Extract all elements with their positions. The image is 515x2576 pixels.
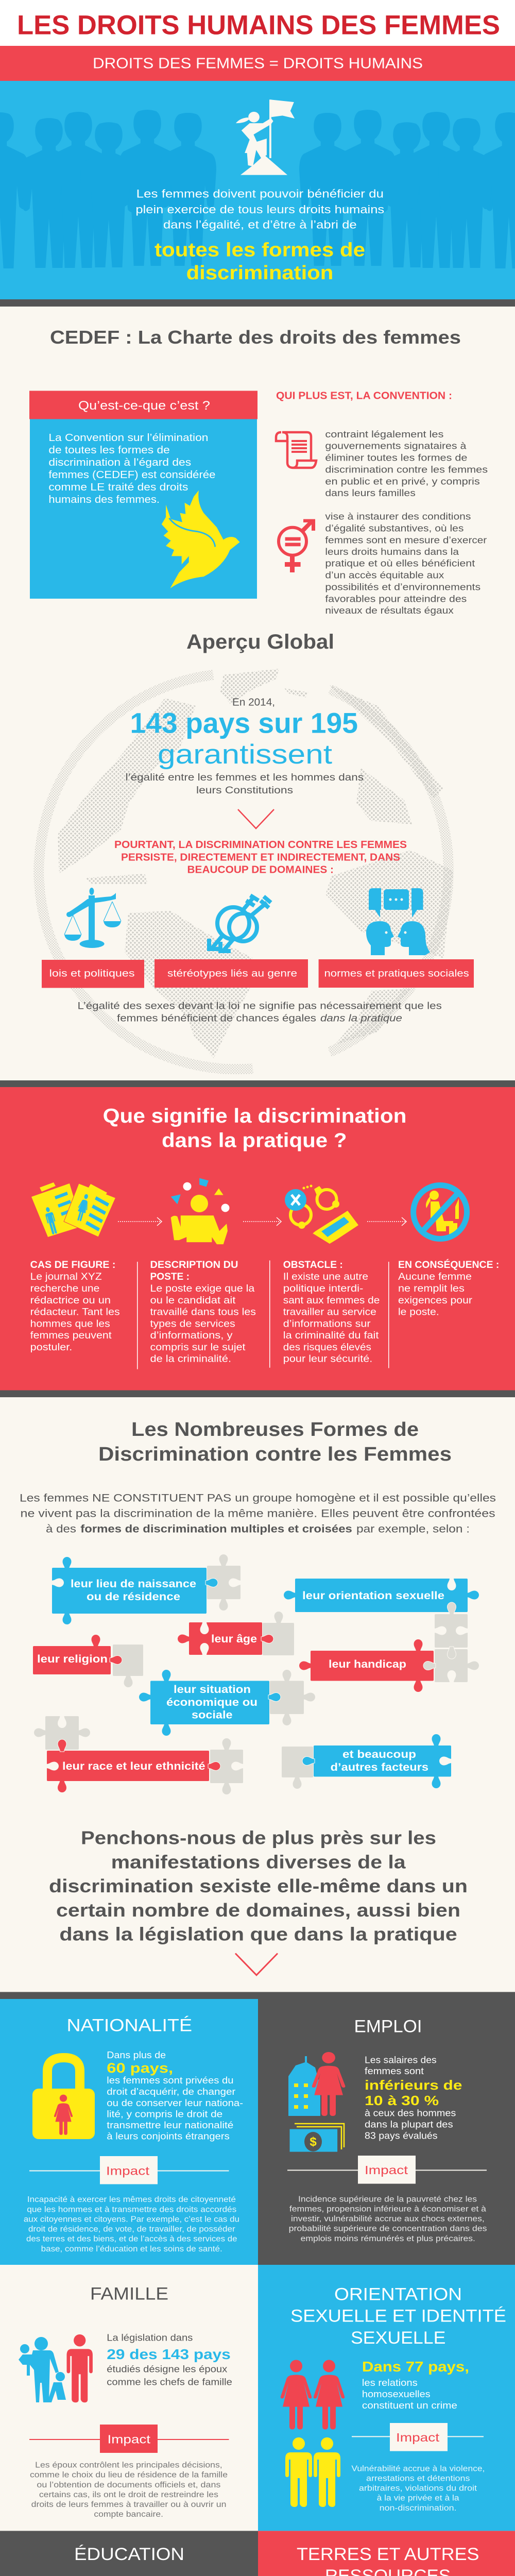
column: obstacle: OBSTACLE : xyxy=(283,1259,343,1270)
text: vise: pratique et où elles bénéficient xyxy=(325,558,475,569)
stat: 143 pays: En 2014, xyxy=(232,697,275,708)
impact text xyxy=(289,2195,487,2243)
impact text: certains cas, ils ont le droit de restreindre les xyxy=(39,2490,218,2499)
arrow: chevron xyxy=(235,1954,278,1975)
impact text: Les époux contrôlent les principales décisions, xyxy=(35,2461,222,2470)
panel: éducation xyxy=(0,2531,258,2576)
puzzle: religion: leur religion xyxy=(37,1653,108,1665)
hero text: dans l’égalité, et d’être à l’abri de xyxy=(163,218,357,231)
impact text: des terres et des biens, et de l’accès à des services de xyxy=(26,2235,237,2244)
impact text: probabilité supérieure de concentration dans des xyxy=(289,2225,487,2233)
text: definition xyxy=(48,432,215,505)
column: obstacle: des risques élevés xyxy=(283,1342,371,1353)
puzzle: autres facteurs: d’autres facteurs xyxy=(331,1761,428,1773)
text: vise: d’un accès équitable aux xyxy=(325,570,444,580)
panel: nationalité: NATIONALITÉ xyxy=(67,2015,192,2035)
stat text: Les salaires des xyxy=(365,2055,437,2065)
text: definition: La Convention sur l’élimination xyxy=(48,432,208,444)
text: contraint: discrimination contre les femmes xyxy=(325,465,488,475)
icon: couples xyxy=(281,2360,345,2507)
column: description du poste: DESCRIPTION DU xyxy=(150,1259,238,1270)
impact text: droit de résidence, de vote, de travailler, de posséder xyxy=(28,2225,235,2234)
column: cas de figure: rédacteur. Tant les xyxy=(30,1307,120,1318)
domain boxes: stéréotypes liés au genre xyxy=(167,969,297,979)
heading: penchons-nous: certain nombre de domaines, aussi bien xyxy=(56,1900,460,1921)
impact text: compte bancaire. xyxy=(94,2510,163,2519)
text: vise: niveaux de résultats égaux xyxy=(325,605,454,616)
arrow 3 xyxy=(367,1217,406,1226)
column: obstacle: la criminalité du fait xyxy=(283,1330,379,1341)
stat: 143 pays: 143 pays sur 195 xyxy=(130,707,358,739)
arrow 2 xyxy=(243,1217,281,1226)
domain boxes: lois et politiques xyxy=(49,969,135,979)
column: cas de figure: femmes peuvent xyxy=(30,1330,112,1341)
stat text: inférieurs de xyxy=(365,2077,462,2093)
panel: famille xyxy=(0,2265,258,2531)
icon: no entry woman xyxy=(414,1185,467,1239)
crowd silhouettes xyxy=(0,110,515,268)
column: description du poste: Le poste exige que la xyxy=(150,1283,254,1294)
icon: talking heads xyxy=(366,888,430,955)
icon: banknotes: $ xyxy=(310,2135,317,2149)
impact text: investir, vulnérabilité accrue aux chocs externes, xyxy=(291,2215,485,2224)
panel: orientation sexuelle: SEXUELLE ET IDENTITÉ xyxy=(290,2306,506,2326)
column: description du poste: types de services xyxy=(150,1318,235,1329)
icon: scroll xyxy=(276,432,316,468)
text: égalité devant la loi: L’égalité des sexes devant la loi ne signifie pas nécessairement que les xyxy=(77,1001,442,1012)
hero text: Les femmes doivent pouvoir bénéficier du xyxy=(136,187,384,200)
puzzle: religion xyxy=(33,1635,143,1687)
column: obstacle: sant aux femmes de xyxy=(283,1295,380,1306)
text: vise xyxy=(325,511,487,616)
hero text xyxy=(135,187,384,231)
stat: 143 pays xyxy=(126,697,364,796)
heading: penchons-nous xyxy=(49,1827,468,1945)
column: en conséquence: le poste. xyxy=(398,1307,439,1318)
impact text: arrestations et détentions xyxy=(366,2474,470,2483)
icon: gender symbols xyxy=(209,895,271,951)
title: LES DROITS HUMAINS DES FEMMES xyxy=(17,10,500,41)
impact text: femmes, propension inférieure à économiser et à xyxy=(289,2205,486,2213)
stat text: La législation dans xyxy=(107,2333,193,2343)
heading: qui plus est: QUI PLUS EST, LA CONVENTION : xyxy=(276,391,452,402)
column: obstacle xyxy=(283,1259,380,1364)
text: vise: possibilités et d’environnements xyxy=(325,582,480,592)
column: cas de figure: CAS DE FIGURE : xyxy=(30,1259,116,1270)
impact text: aux citoyennes et citoyens. Par exemple, c’est le cas du xyxy=(24,2215,239,2224)
puzzle: orientation sexuelle: leur orientation sexuelle xyxy=(302,1590,444,1602)
column: en conséquence: exigences pour xyxy=(398,1295,473,1306)
banner: droits des femmes: DROITS DES FEMMES = DROITS HUMAINS xyxy=(93,56,423,72)
text: groupe homogène xyxy=(20,1492,496,1535)
column: description du poste: POSTE : xyxy=(150,1271,190,1282)
stat text xyxy=(362,2359,469,2411)
impact text xyxy=(30,2461,228,2519)
domain boxes: normes et pratiques sociales xyxy=(324,969,469,979)
impact label: Impact xyxy=(106,2164,150,2177)
hero text: plein exercice de tous leurs droits humains xyxy=(135,203,384,216)
panel: hero xyxy=(0,81,515,299)
column: cas de figure: hommes que les xyxy=(30,1318,110,1329)
text: vise: leurs droits humains dans la xyxy=(325,547,459,557)
stat text: 83 pays évalués xyxy=(365,2130,438,2141)
stat text xyxy=(107,2050,243,2142)
text: pourtant xyxy=(114,839,407,875)
column: en conséquence: EN CONSÉQUENCE : xyxy=(398,1259,499,1270)
icon: family xyxy=(19,2334,93,2402)
stat text: à leurs conjoints étrangers xyxy=(107,2131,230,2142)
text: vise: vise à instaurer des conditions xyxy=(325,511,471,521)
stat text: droit d’acquérir, de changer xyxy=(107,2087,235,2097)
panel: qu'est-ce que c'est: Qu’est-ce-que c’est ? xyxy=(78,399,210,413)
stat text: les relations xyxy=(362,2378,418,2388)
stat text: Dans 77 pays, xyxy=(362,2359,469,2375)
puzzle: âge: leur âge xyxy=(211,1633,257,1645)
stat text: dans la plupart des xyxy=(365,2120,453,2130)
column: obstacle: politique interdi- xyxy=(283,1283,363,1294)
puzzle: handicap: leur handicap xyxy=(329,1658,406,1670)
column: description du poste: de la criminalité. xyxy=(150,1353,231,1364)
impact text: Vulnérabilité accrue à la violence, xyxy=(351,2464,485,2473)
panel: nationalité xyxy=(0,1992,515,2265)
impact text: non-discrimination. xyxy=(380,2504,457,2513)
hero highlight xyxy=(154,239,365,284)
puzzle: lieu de naissance xyxy=(52,1554,241,1624)
text: definition: comme LE traité des droits xyxy=(48,481,188,493)
puzzle: orientation sexuelle xyxy=(284,1578,479,1683)
puzzle: lieu de naissance: leur lieu de naissance xyxy=(71,1578,196,1590)
icon: padlock xyxy=(32,2058,95,2139)
text: vise: favorables pour atteindre des xyxy=(325,594,467,604)
panel: éducation: ÉDUCATION xyxy=(74,2545,184,2564)
puzzle: handicap xyxy=(299,1639,436,1692)
column: en conséquence: Aucune femme xyxy=(398,1271,472,1282)
panel: orientation sexuelle: ORIENTATION xyxy=(334,2285,462,2304)
impact text: ou l’obtention de documents officiels et, dans xyxy=(37,2481,221,2489)
column: cas de figure xyxy=(30,1259,120,1353)
hero highlight: discrimination xyxy=(186,262,333,284)
icon: dove xyxy=(162,490,240,588)
text: pourtant: BEAUCOUP DE DOMAINES : xyxy=(187,864,334,875)
puzzle: autres facteurs: et beaucoup xyxy=(342,1749,416,1760)
text: definition: discrimination à l’égard des xyxy=(48,456,191,468)
stat text: 60 pays, xyxy=(107,2060,173,2076)
text: groupe homogène: formes de discrimination multiples et croisées xyxy=(80,1522,352,1535)
heading: penchons-nous: dans la législation que dans la pratique xyxy=(59,1924,457,1945)
panel: famille: FAMILLE xyxy=(90,2284,168,2304)
stat: 143 pays: leurs Constitutions xyxy=(196,785,293,796)
impact text: arbitraires, violations du droit xyxy=(359,2484,477,2493)
column: en conséquence xyxy=(398,1259,499,1318)
puzzle: autres facteurs xyxy=(282,1734,452,1789)
text: groupe homogène: ne vivent pas la discrimination de la même manière. Elles peuvent être confrontées xyxy=(21,1507,495,1519)
hero highlight: toutes les formes de xyxy=(154,239,365,261)
panel: qu'est-ce que c'est xyxy=(29,391,258,599)
text: pourtant: PERSISTE, DIRECTEMENT ET INDIRECTEMENT, DANS xyxy=(121,852,400,863)
column: obstacle: pour leur sécurité. xyxy=(283,1353,372,1364)
panel: emploi: EMPLOI xyxy=(354,2016,422,2036)
text: vise: d’égalité substantives, où les xyxy=(325,523,464,534)
arrow: chevron xyxy=(238,809,274,828)
stat text: étudiés désigne les époux xyxy=(107,2364,227,2375)
panel: orientation sexuelle xyxy=(258,2265,515,2531)
text: contraint: éliminer toutes les formes de xyxy=(325,452,467,463)
column: obstacle: Il existe une autre xyxy=(283,1271,368,1282)
text: égalité devant la loi: dans la pratique xyxy=(320,1013,402,1024)
heading: Que signifie la discrimination xyxy=(103,1105,407,1127)
text: vise: femmes sont en mesure d’exercer xyxy=(325,535,487,545)
puzzle: race et ethnicité: leur race et leur ethnicité xyxy=(62,1760,205,1772)
text: pourtant: POURTANT, LA DISCRIMINATION CONTRE LES FEMMES xyxy=(114,839,407,851)
stat text xyxy=(107,2333,232,2387)
stat text: à ceux des hommes xyxy=(365,2108,456,2119)
puzzle: situation économique: sociale xyxy=(192,1709,233,1721)
stat text: homosexuelles xyxy=(362,2389,431,2399)
column: description du poste: travaillé dans tous les xyxy=(150,1307,256,1318)
icon: woman with flag xyxy=(236,99,295,175)
icon: banknotes xyxy=(289,2124,344,2152)
text: contraint: dans leurs familles xyxy=(325,488,416,498)
heading xyxy=(103,1105,407,1152)
icon: job description person xyxy=(171,1178,230,1244)
stat text xyxy=(365,2055,462,2141)
text: contraint: gouvernements signataires à xyxy=(325,441,467,451)
heading: aperçu global: Aperçu Global xyxy=(186,631,334,653)
heading: nombreuses formes: Discrimination contre les Femmes xyxy=(98,1444,452,1465)
impact text: droits de leurs femmes à travailler ou à ouvrir un xyxy=(31,2500,226,2509)
title xyxy=(0,0,515,46)
column: description du poste: d’informations, y xyxy=(150,1330,233,1341)
stat text: comme les chefs de famille xyxy=(107,2377,232,2387)
stat: 143 pays: l’égalité entre les femmes et les hommes dans xyxy=(126,772,364,783)
icon: clipboards xyxy=(31,1182,115,1237)
impact text: comme le choix du lieu de résidence de la famille xyxy=(30,2471,228,2480)
panel: orientation sexuelle: SEXUELLE xyxy=(351,2328,445,2348)
impact text: emplois moins rémunérés et plus précaires. xyxy=(301,2234,475,2243)
heading: CEDEF: CEDEF : La Charte des droits des femmes xyxy=(50,327,461,348)
impact text: base, comme l’éducation et les soins de santé. xyxy=(41,2245,222,2253)
puzzle: situation économique: économique ou xyxy=(166,1697,258,1708)
icon: handcuffs and newspaper xyxy=(285,1185,358,1244)
puzzle: lieu de naissance: ou de résidence xyxy=(87,1591,180,1603)
impact text: Incapacité à exercer les mêmes droits de citoyenneté xyxy=(27,2195,236,2204)
column: cas de figure: Le journal XYZ xyxy=(30,1271,102,1282)
stat text: Dans plus de xyxy=(107,2050,166,2060)
stat text: constituent un crime xyxy=(362,2400,457,2411)
heading: dans la pratique ? xyxy=(162,1130,347,1152)
stat text: les femmes sont privées du xyxy=(107,2075,234,2086)
text: groupe homogène: à des xyxy=(46,1522,76,1535)
text: definition: humains des femmes. xyxy=(48,494,160,505)
impact text: que les hommes et à transmettre des droits accordés xyxy=(27,2205,237,2214)
puzzle: âge xyxy=(178,1612,294,1655)
icon: scales xyxy=(64,888,121,948)
icon: building and woman xyxy=(288,2052,345,2116)
impact label: Impact xyxy=(396,2431,440,2444)
text: égalité devant la loi: femmes bénéficient de chances égales xyxy=(117,1013,316,1024)
heading: penchons-nous: discrimination sexiste elle-même dans un xyxy=(49,1875,468,1896)
text: definition: femmes (CEDEF) est considérée xyxy=(48,469,215,481)
column: en conséquence: ne remplit les xyxy=(398,1283,465,1294)
column: description du poste: ou le candidat ait xyxy=(150,1295,236,1306)
column: obstacle: d’informations sur xyxy=(283,1318,371,1329)
text: contraint: contraint légalement les xyxy=(325,429,443,439)
stat text: femmes sont xyxy=(365,2066,424,2076)
stat text: transmettre leur nationalité xyxy=(107,2120,233,2130)
text: contraint: en public et en privé, y compris xyxy=(325,476,480,486)
domain boxes xyxy=(42,959,474,988)
text: égalité devant la loi xyxy=(77,1001,442,1024)
column: description du poste: compris sur le sujet xyxy=(150,1342,246,1353)
stat text: ou de conserver leur nationa- xyxy=(107,2098,243,2108)
impact label: Impact xyxy=(107,2433,151,2446)
column: obstacle: travailler au service xyxy=(283,1307,376,1318)
stat text: lité, y compris le droit de xyxy=(107,2109,222,2120)
impact text: Incidence supérieure de la pauvreté chez les xyxy=(298,2195,477,2204)
column: cas de figure: postuler. xyxy=(30,1342,72,1353)
impact text: à la vie privée et à la xyxy=(377,2494,459,2503)
globe background xyxy=(39,669,453,1069)
column: cas de figure: rédactrice ou un xyxy=(30,1295,111,1306)
stat: 143 pays: garantissent xyxy=(158,739,332,770)
text: definition: de toutes les formes de xyxy=(48,444,170,456)
text: groupe homogène: par exemple, selon : xyxy=(356,1522,470,1535)
puzzle: situation économique: leur situation xyxy=(174,1684,251,1696)
column: cas de figure: recherche une xyxy=(30,1283,99,1294)
panel: terres xyxy=(258,2531,515,2576)
impact label xyxy=(29,2425,229,2453)
panel: emploi xyxy=(258,1999,515,2265)
puzzle: situation économique xyxy=(139,1670,315,1736)
puzzle: race et ethnicité xyxy=(34,1716,244,1794)
impact label xyxy=(29,2156,229,2184)
panel: que signifie xyxy=(0,1080,515,1391)
impact label: Impact xyxy=(365,2163,408,2177)
impact text xyxy=(24,2195,239,2253)
impact label xyxy=(287,2156,487,2184)
heading: nombreuses formes xyxy=(98,1419,452,1465)
text: contraint xyxy=(325,429,488,498)
stat text: 10 à 30 % xyxy=(365,2093,439,2108)
impact label xyxy=(352,2423,484,2451)
panel: terres: TERRES ET AUTRES xyxy=(297,2545,479,2564)
arrow 1 xyxy=(118,1217,162,1226)
heading: penchons-nous: manifestations diverses de la xyxy=(111,1851,406,1872)
text: groupe homogène: Les femmes NE CONSTITUENT PAS un groupe homogène et il est possible qu’elles xyxy=(20,1492,496,1504)
column: description du poste xyxy=(150,1259,256,1364)
stat text: 29 des 143 pays xyxy=(107,2346,231,2362)
icon: gender equality xyxy=(279,519,315,572)
impact text xyxy=(351,2464,485,2513)
banner: droits des femmes xyxy=(0,46,515,81)
heading: nombreuses formes: Les Nombreuses Formes de xyxy=(131,1419,419,1440)
heading: penchons-nous: Penchons-nous de plus près sur les xyxy=(81,1827,436,1848)
